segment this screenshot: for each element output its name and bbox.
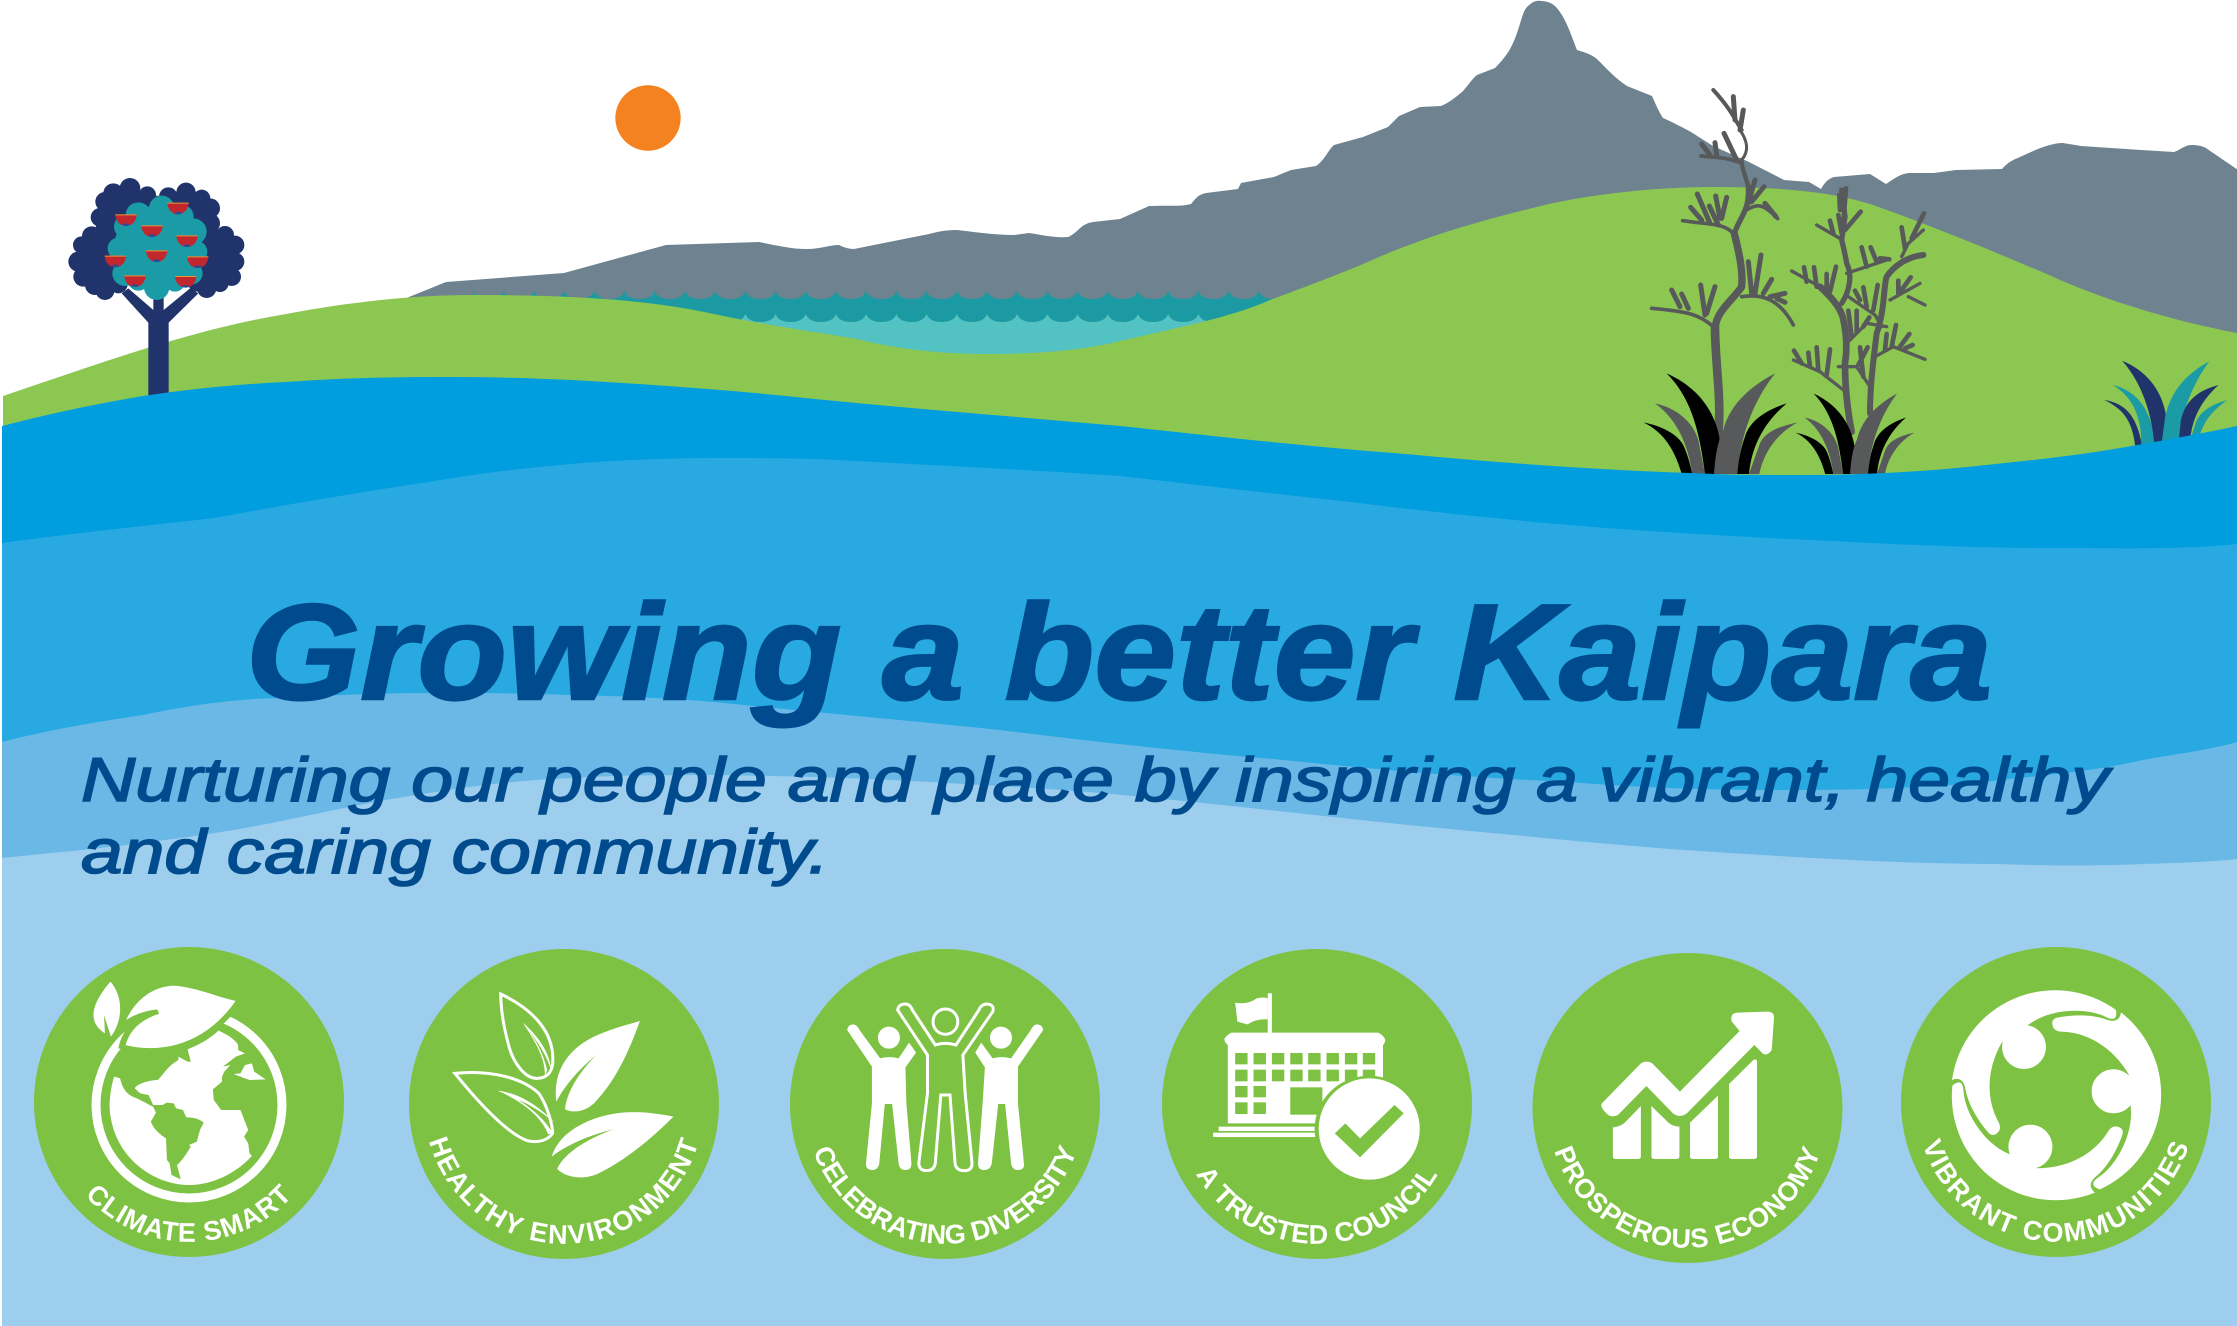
badge: climate smart — [34, 947, 344, 1257]
icon: globe with leaves — [94, 982, 282, 1198]
mountain range — [404, 1, 2237, 420]
label: PROSPEROUS ECONOMY — [1554, 1145, 1818, 1248]
badge: a trusted council — [1162, 949, 1472, 1259]
panel: blue water bands — [2, 377, 2237, 1326]
tree — [68, 178, 244, 397]
label: VIBRANT COMMUNITIES — [1924, 1138, 2188, 1242]
panel: landscape scene — [3, 1, 2237, 520]
green hills — [3, 187, 2237, 520]
flax leaves right — [1796, 393, 1915, 474]
label: CLIMATE SMART — [88, 1183, 288, 1242]
band 4 — [2, 775, 2237, 1326]
flax stalks right — [1792, 188, 1925, 432]
badge: celebrating diversity — [790, 949, 1100, 1259]
title: Growing a better Kaipara — [246, 576, 1992, 728]
label: HEALTHY ENVIRONMENT — [429, 1136, 697, 1244]
label: CELEBRATING DIVERSITY — [816, 1144, 1074, 1244]
icon: three people cheering — [847, 1004, 1043, 1171]
grass tuft right — [2104, 361, 2227, 450]
band 3 — [2, 693, 2237, 1326]
icon: leaves — [455, 994, 673, 1177]
icon: growth chart — [1601, 1012, 1774, 1159]
lagoon water — [470, 284, 1349, 372]
subtitle — [81, 746, 2114, 887]
label: A TRUSTED COUNCIL — [1196, 1170, 1438, 1244]
subtitle: Nurturing our people and place by inspiring a vibrant, healthy — [81, 746, 2114, 815]
icon: linked community circle — [1935, 985, 2199, 1237]
flax plants — [1643, 90, 1925, 474]
badge: healthy environment — [409, 949, 719, 1259]
flax leaves left — [1643, 373, 1798, 474]
band 1 — [2, 377, 2237, 1326]
badge: vibrant communities — [1901, 947, 2211, 1257]
sun — [615, 85, 681, 151]
band 2 — [2, 458, 2237, 1326]
icon: council building with tick — [1213, 993, 1424, 1182]
subtitle: and caring community. — [81, 818, 829, 887]
flax stalks left — [1652, 90, 1793, 433]
badge: prosperous economy — [1532, 953, 1842, 1263]
